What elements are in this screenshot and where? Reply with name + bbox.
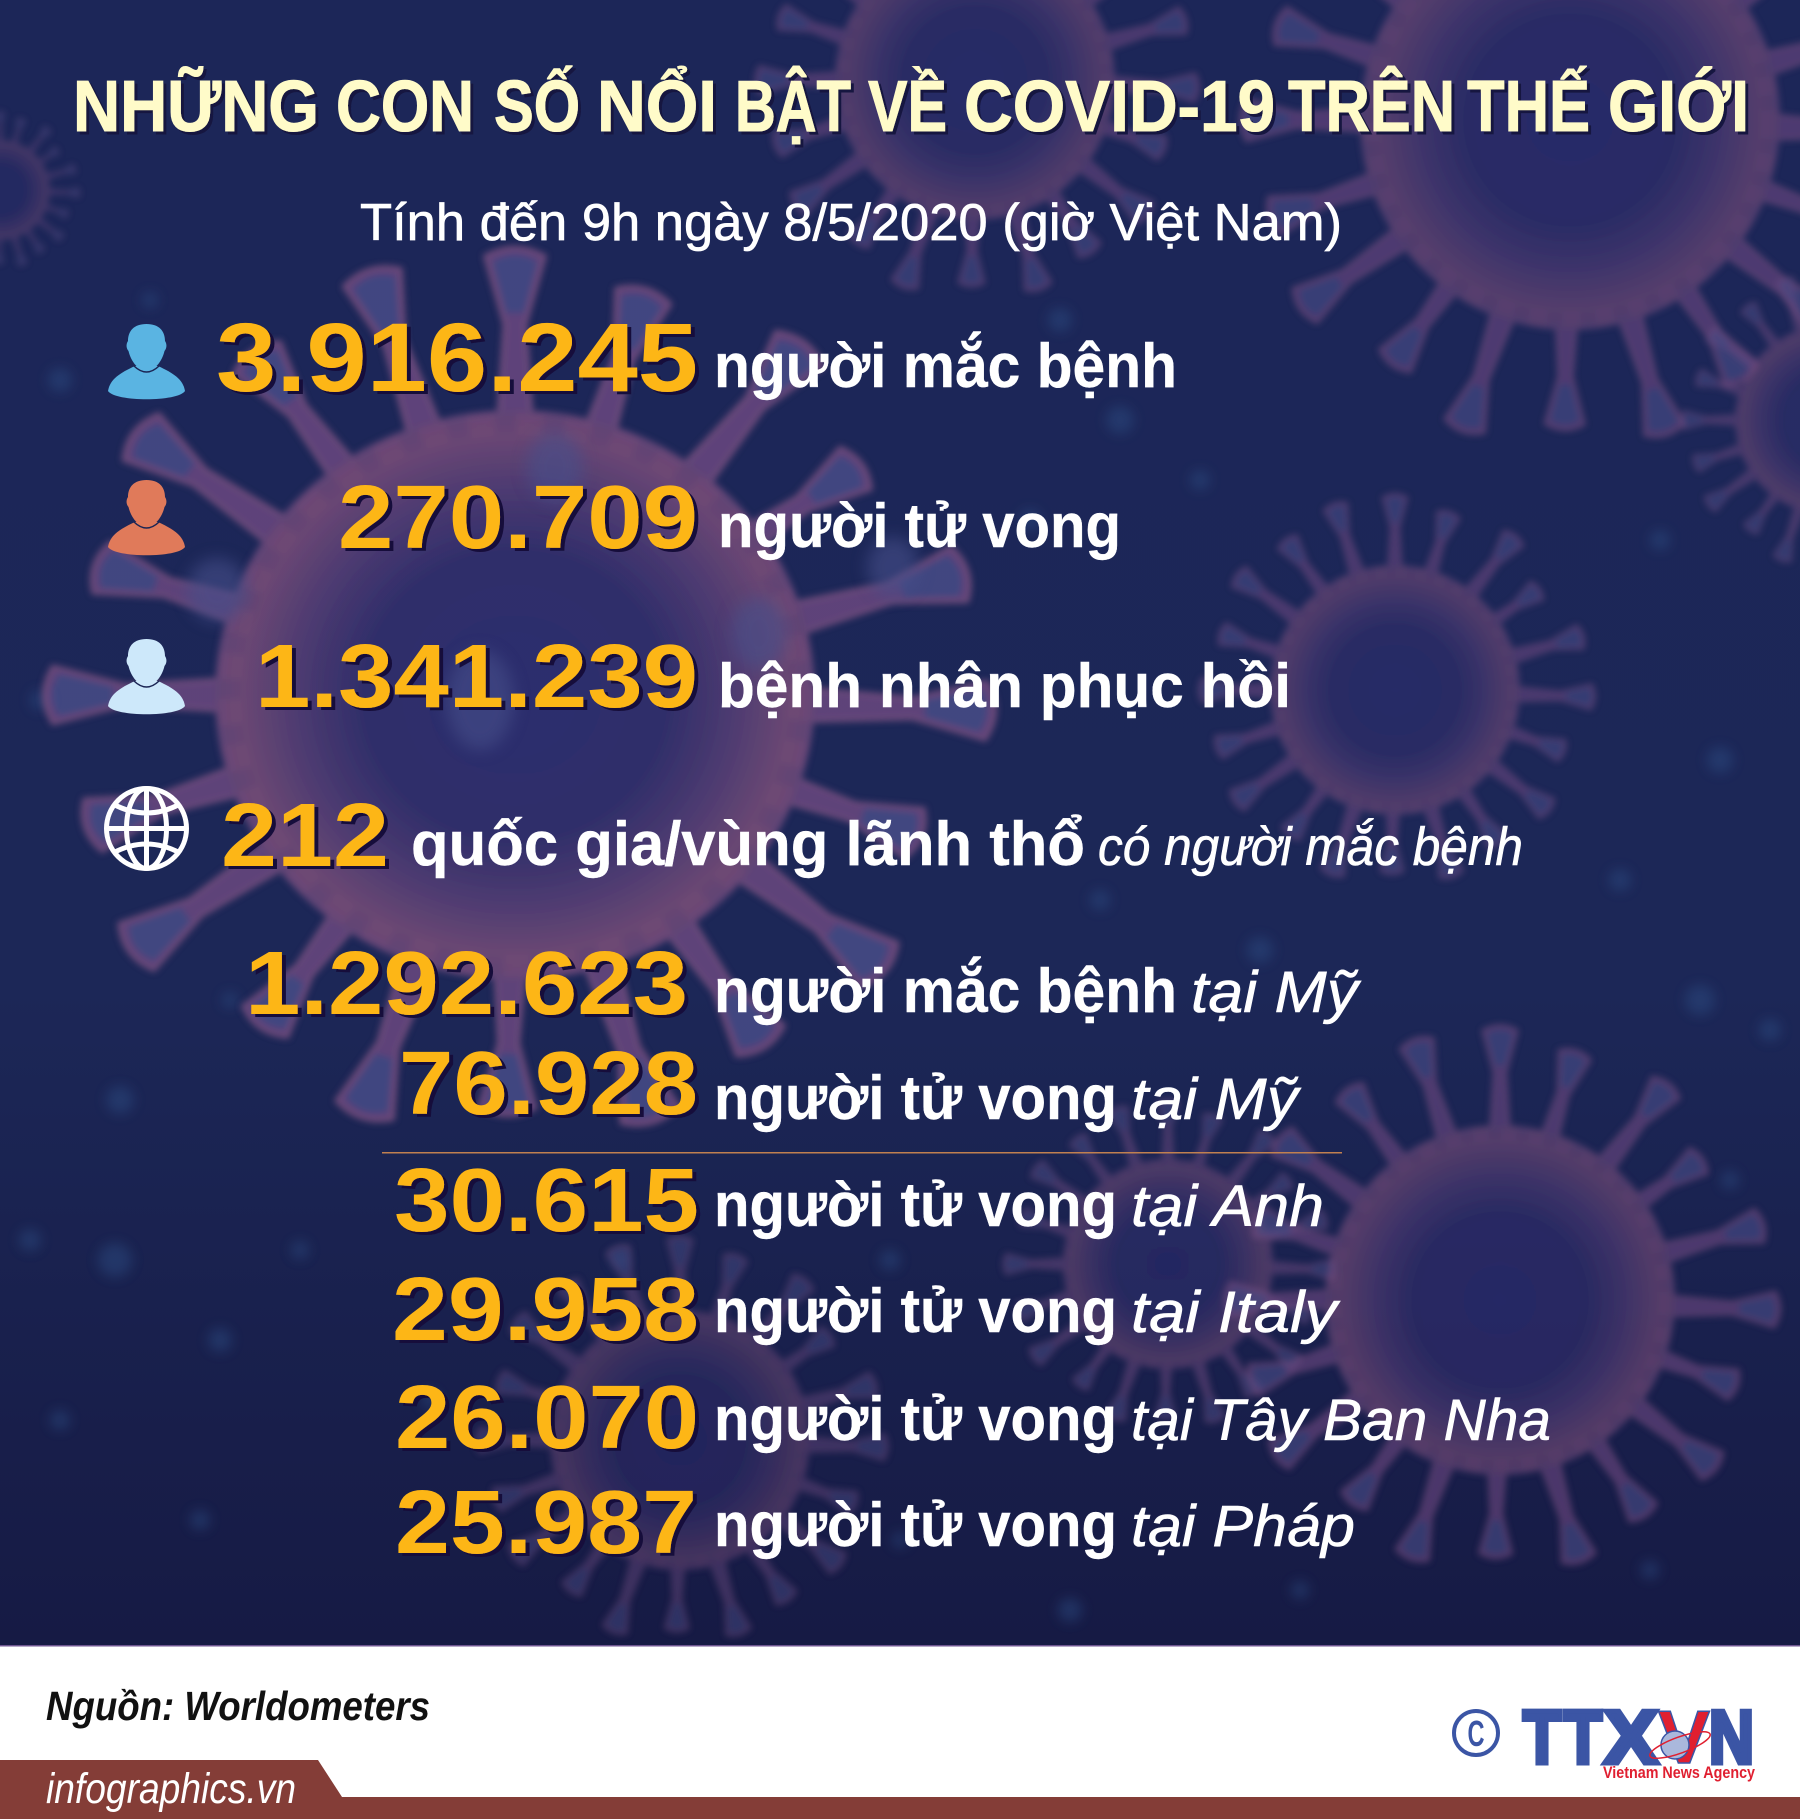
stat: US cases: 1.292.623 bbox=[245, 934, 688, 1034]
logo: TTXVN: T bbox=[1564, 1695, 1602, 1779]
stat: Italy deaths: 29.958 bbox=[392, 1260, 699, 1360]
footer panel bbox=[0, 1645, 1800, 1819]
title: GIỚI bbox=[1608, 66, 1749, 147]
stat: countries: 212 bbox=[221, 786, 389, 886]
stat: UK deaths: 30.615 bbox=[394, 1151, 699, 1251]
stat: France deaths: tại Pháp bbox=[1131, 1494, 1355, 1559]
stat: US deaths: người tử vong bbox=[714, 1064, 1117, 1133]
source text: Nguồn: Worldometers bbox=[46, 1683, 430, 1729]
stat: UK deaths: tại Anh bbox=[1131, 1174, 1324, 1239]
stat: deaths: người tử vong bbox=[718, 492, 1121, 561]
title: CON bbox=[336, 67, 474, 147]
title: THẾ bbox=[1467, 66, 1590, 147]
stat: Italy deaths: tại Italy bbox=[1131, 1280, 1340, 1345]
stat: total cases bbox=[216, 303, 1177, 412]
icon: globe bbox=[106, 788, 187, 869]
stat: total cases: 3.916.245 bbox=[216, 303, 698, 412]
logo: TTXVN: T bbox=[1523, 1695, 1561, 1779]
title: TRÊN bbox=[1288, 66, 1455, 147]
stat: Spain deaths bbox=[395, 1368, 1551, 1468]
stat: Spain deaths: tại Tây Ban Nha bbox=[1131, 1388, 1551, 1453]
stat: deaths bbox=[338, 468, 1121, 568]
logo: TTXVN bbox=[1454, 1695, 1755, 1782]
title: NHỮNG bbox=[73, 66, 319, 147]
stat: US cases bbox=[245, 934, 1361, 1034]
title: VỀ bbox=[868, 66, 947, 147]
stat: countries: quốc gia/vùng lãnh thổ bbox=[411, 810, 1085, 879]
stat: Italy deaths bbox=[392, 1260, 1340, 1360]
stat: US deaths: 76.928 bbox=[399, 1034, 698, 1134]
subtitle: Tính đến 9h ngày 8/5/2020 (giờ Việt Nam) bbox=[360, 194, 1342, 252]
title: NỔI bbox=[597, 66, 717, 147]
stat: UK deaths bbox=[394, 1151, 1324, 1251]
stat: France deaths: người tử vong bbox=[714, 1491, 1117, 1560]
stat: recovered: bệnh nhân phục hồi bbox=[718, 652, 1291, 721]
logo: TTXVN: Vietnam News Agency bbox=[1603, 1763, 1755, 1782]
stat: France deaths bbox=[395, 1473, 1355, 1573]
stat: US cases: người mắc bệnh bbox=[714, 957, 1177, 1026]
icon: blue person bbox=[108, 324, 185, 399]
stat: countries: có người mắc bệnh bbox=[1098, 817, 1523, 877]
title: BẬT bbox=[735, 66, 851, 147]
website label: infographics.vn bbox=[46, 1765, 296, 1813]
icon: pale blue person bbox=[108, 639, 185, 714]
stat: recovered: 1.341.239 bbox=[255, 627, 698, 727]
stat: Spain deaths: 26.070 bbox=[395, 1368, 699, 1468]
stat: countries bbox=[221, 786, 1523, 886]
logo: TTXVN: N bbox=[1709, 1695, 1754, 1779]
icon: orange person bbox=[108, 480, 185, 555]
logo: TTXVN: X bbox=[1604, 1695, 1658, 1779]
stat: US cases: tại Mỹ bbox=[1191, 960, 1361, 1025]
title bbox=[73, 65, 1749, 147]
stat: deaths: 270.709 bbox=[338, 468, 698, 568]
stat: Italy deaths: người tử vong bbox=[714, 1277, 1117, 1346]
stat: UK deaths: người tử vong bbox=[714, 1171, 1117, 1240]
stat: Spain deaths: người tử vong bbox=[714, 1385, 1117, 1454]
logo: TTXVN: V bbox=[1658, 1695, 1710, 1779]
logo: TTXVN: C bbox=[1468, 1713, 1484, 1754]
stat: recovered bbox=[255, 627, 1291, 727]
stat: US deaths: tại Mỹ bbox=[1131, 1067, 1301, 1132]
stat: US deaths bbox=[399, 1034, 1301, 1134]
stat: France deaths: 25.987 bbox=[395, 1473, 697, 1573]
stat: total cases: người mắc bệnh bbox=[714, 332, 1177, 401]
title: SỐ bbox=[494, 65, 580, 147]
title: COVID-19 bbox=[964, 67, 1275, 147]
